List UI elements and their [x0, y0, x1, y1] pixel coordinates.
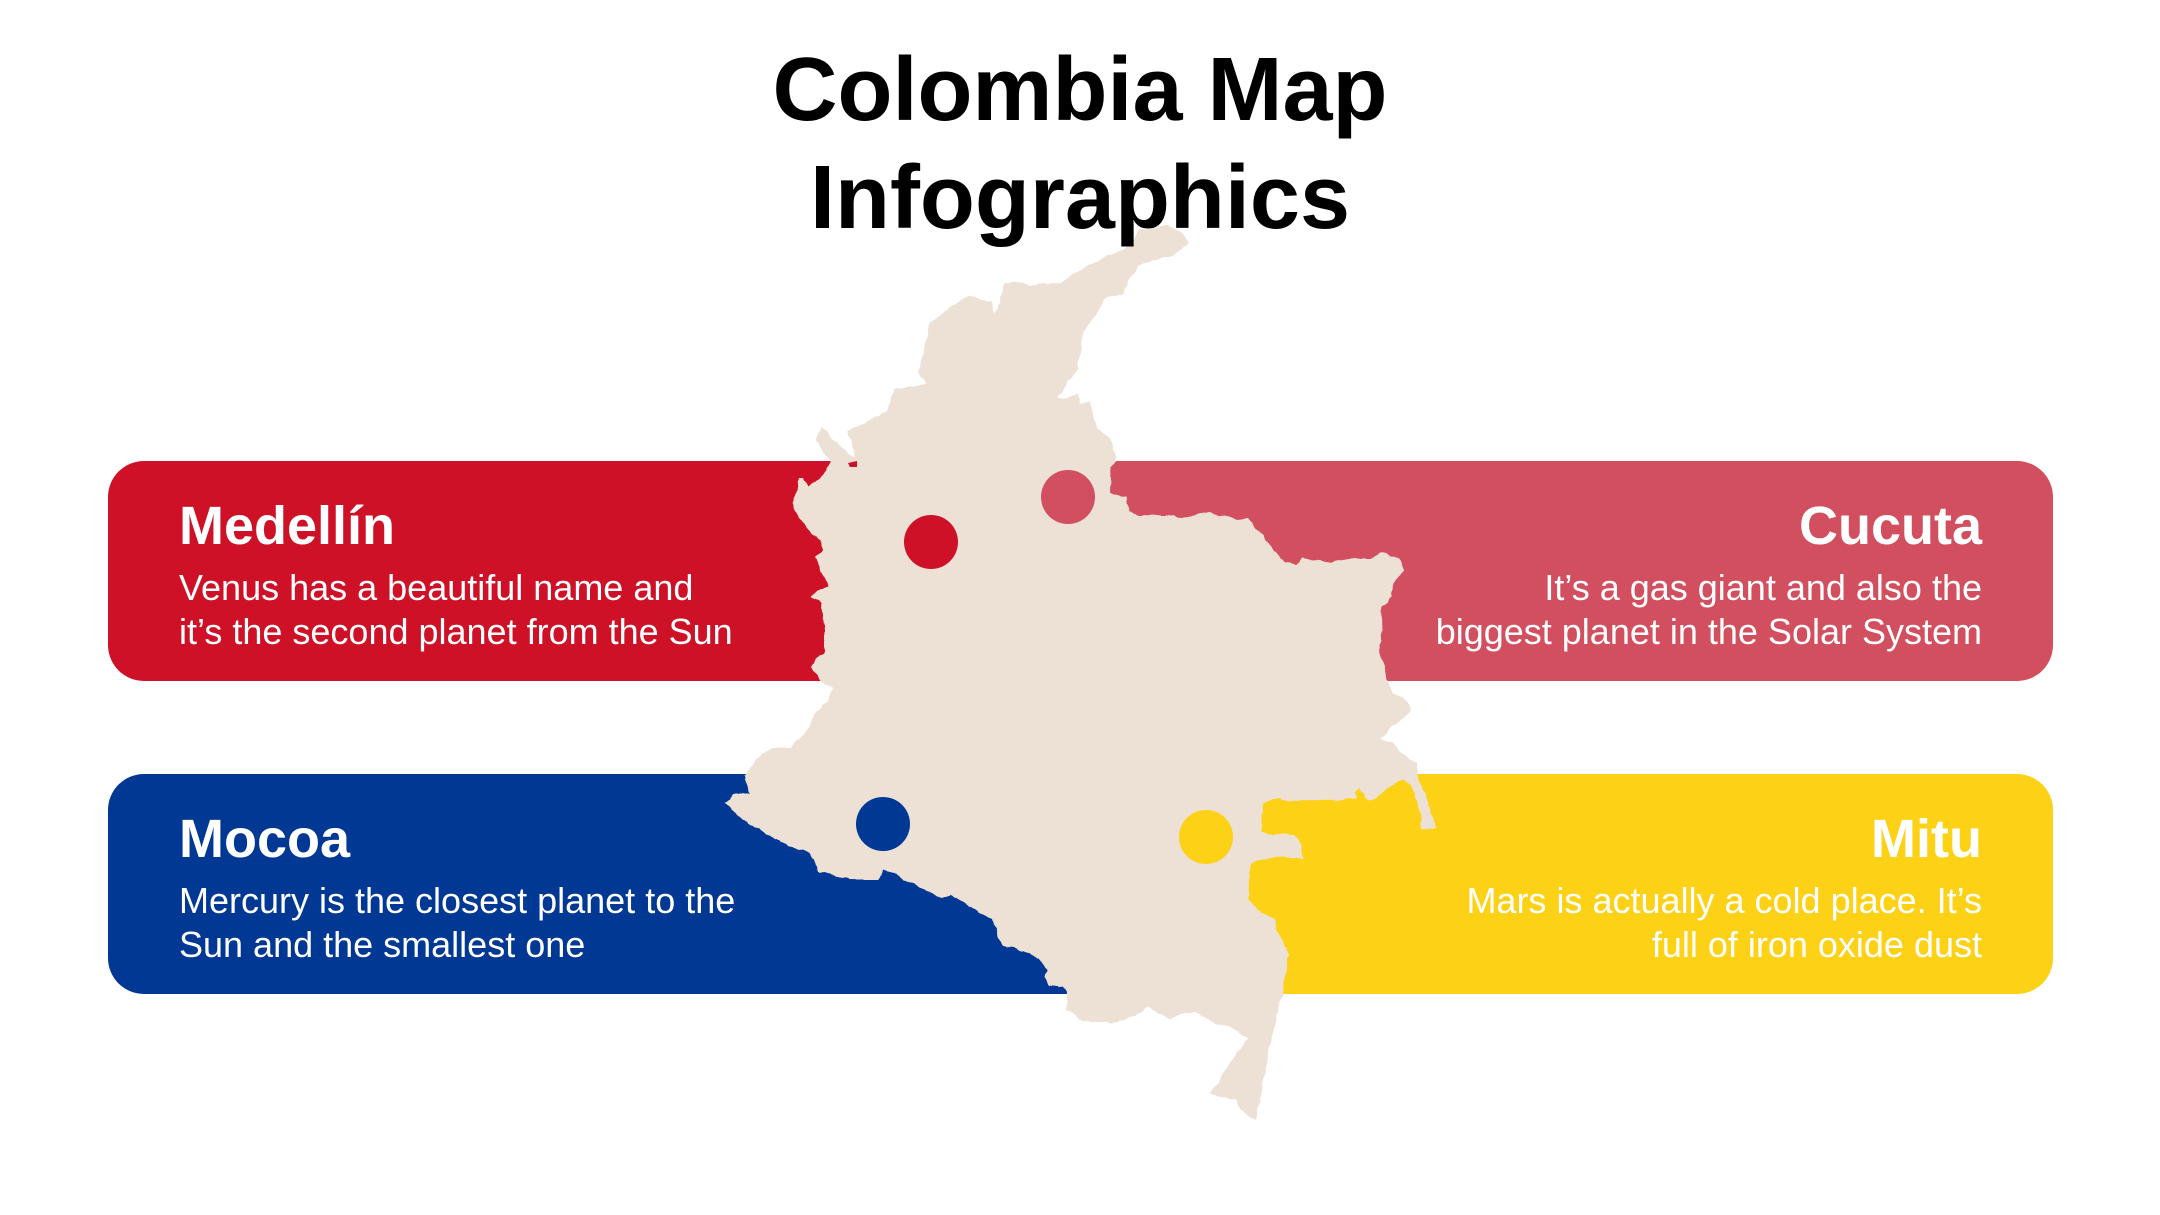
- marker: Medellín: [904, 515, 958, 569]
- text: Mocoa description: Mercury is the closest planet to the: [179, 880, 735, 921]
- title: [772, 40, 1388, 248]
- text: Cucuta description: It’s a gas giant and also the: [1544, 567, 1982, 608]
- heading: Medellín: Medellín: [179, 496, 395, 556]
- text: Cucuta description: biggest planet in the Solar System: [1436, 610, 1982, 652]
- heading: Mitu: Mitu: [1871, 809, 1982, 869]
- text: Mitu description: full of iron oxide dust: [1652, 924, 1982, 964]
- text: Mocoa description: Sun and the smallest one: [179, 924, 585, 964]
- text: Mocoa description: [179, 880, 735, 964]
- text: Medellín description: [179, 567, 733, 652]
- text: Mitu description: [1466, 880, 1982, 964]
- heading: Cucuta: Cucuta: [1799, 496, 1982, 556]
- map silhouette: [725, 224, 1436, 1119]
- text: Cucuta description: [1436, 567, 1982, 652]
- title: Colombia Map: [772, 40, 1388, 140]
- marker: Mitu: [1179, 810, 1233, 864]
- heading: Mocoa: Mocoa: [179, 809, 350, 869]
- panel: Cucuta: [1000, 461, 2053, 681]
- panel: Medellín: [108, 461, 1000, 681]
- title: Infographics: [810, 148, 1350, 248]
- text: Medellín description: Venus has a beautiful name and: [179, 567, 693, 608]
- marker: Cucuta: [1041, 470, 1095, 524]
- text: Mitu description: Mars is actually a cold place. It’s: [1466, 880, 1982, 921]
- text: Medellín description: it’s the second planet from the Sun: [179, 610, 733, 652]
- gulf water notch: [848, 461, 857, 467]
- marker: Mocoa: [856, 797, 910, 851]
- panel: Mitu: [1150, 774, 2053, 994]
- panel: Mocoa: [108, 774, 1150, 994]
